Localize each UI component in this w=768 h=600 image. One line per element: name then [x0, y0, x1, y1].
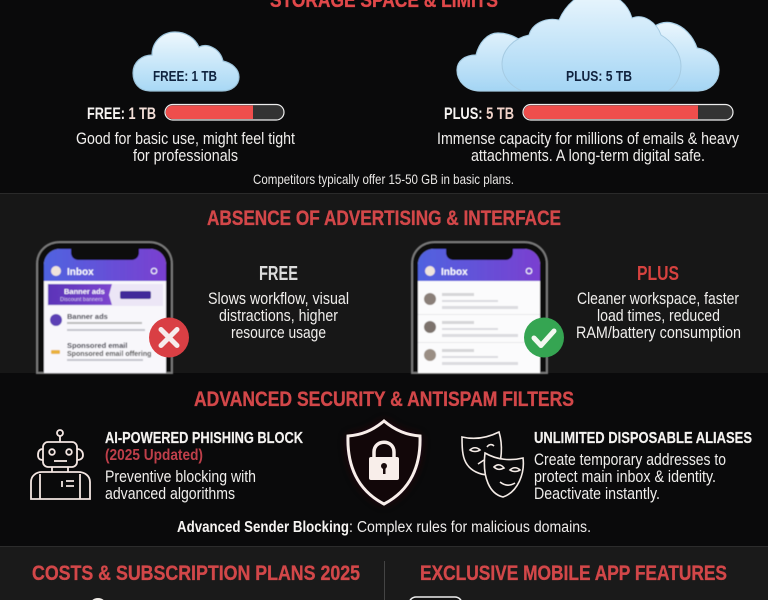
plus ad description: load times, reduced	[597, 306, 720, 325]
free storage bar	[165, 104, 284, 120]
icon: theatre masks	[462, 432, 523, 497]
free ad description	[208, 263, 349, 342]
sender blocking note: : Complex rules for malicious domains.	[349, 519, 591, 536]
free ad description: FREE	[259, 263, 298, 285]
icon: free cloud	[133, 32, 239, 91]
sender blocking note	[177, 519, 591, 536]
panel: exclusive mobile app features	[409, 562, 727, 600]
phone: free inbox with ads: Banner ads	[64, 287, 105, 296]
AI phishing block text: (2025 Updated)	[105, 447, 203, 464]
panel: advanced security and antispam filters	[31, 388, 752, 536]
free ad description: Slows workflow, visual	[208, 289, 349, 308]
free storage description: Good for basic use, might feel tight	[76, 129, 295, 148]
plus ad description: PLUS	[637, 263, 679, 285]
free ad description: resource usage	[231, 323, 326, 342]
phone: free inbox with ads	[37, 242, 172, 373]
heading: security: ADVANCED SECURITY & ANTISPAM FILTERS	[194, 388, 574, 411]
plus ad description: RAM/battery consumption	[576, 323, 741, 342]
disposable aliases text: Deactivate instantly.	[534, 484, 660, 503]
panel: absence of advertising and interface	[37, 207, 741, 373]
AI phishing block text	[105, 430, 304, 503]
plus ad description	[576, 263, 741, 342]
plus storage bar	[523, 104, 733, 120]
AI phishing block text: Preventive blocking with	[105, 467, 256, 486]
icon: plus cloud: PLUS: 5 TB	[566, 68, 632, 85]
sender blocking note: Advanced Sender Blocking	[177, 519, 349, 536]
plus storage description	[437, 129, 739, 165]
phone: free inbox with ads: Inbox	[67, 267, 94, 278]
free ad description: distractions, higher	[219, 306, 338, 325]
phone: free inbox with ads: Discount banners	[60, 297, 103, 303]
icon: green check	[524, 318, 564, 358]
plan row icon	[89, 598, 107, 600]
heading: costs: COSTS & SUBSCRIPTION PLANS 2025	[32, 562, 360, 585]
icon: free cloud: FREE: 1 TB	[153, 68, 217, 85]
phone: plus clean inbox: Inbox	[441, 267, 468, 278]
icon: shield with lock	[348, 421, 420, 504]
free storage description: for professionals	[133, 146, 238, 165]
AI phishing block text: AI-POWERED PHISHING BLOCK	[105, 430, 304, 447]
phone: free inbox with ads: Banner ads	[67, 312, 108, 321]
heading: advertising: ABSENCE OF ADVERTISING & INTERFACE	[207, 207, 561, 230]
AI phishing block text: advanced algorithms	[105, 484, 235, 503]
phone: free inbox with ads: Sponsored email	[67, 341, 127, 350]
free storage label: FREE: 1 TB	[87, 104, 156, 123]
feature toggle icon	[409, 597, 462, 600]
plus storage label: PLUS: 5 TB	[444, 104, 514, 123]
icon: robot	[31, 430, 90, 499]
free storage description	[76, 129, 295, 165]
competitors note: Competitors typically offer 15-50 GB in basic plans.	[253, 171, 514, 187]
phone: free inbox with ads: Sponsored email offering	[67, 351, 151, 358]
icon: plus cloud	[457, 0, 719, 91]
phone: plus clean inbox	[412, 242, 547, 373]
panel: storage space and limits	[76, 0, 739, 187]
panel: costs and subscription plans	[32, 562, 360, 600]
disposable aliases text: Create temporary addresses to	[534, 450, 726, 469]
disposable aliases text: protect main inbox & identity.	[534, 467, 716, 486]
icon: red cross	[149, 318, 189, 358]
plus storage description: attachments. A long-term digital safe.	[471, 146, 705, 165]
disposable aliases text	[534, 430, 752, 503]
